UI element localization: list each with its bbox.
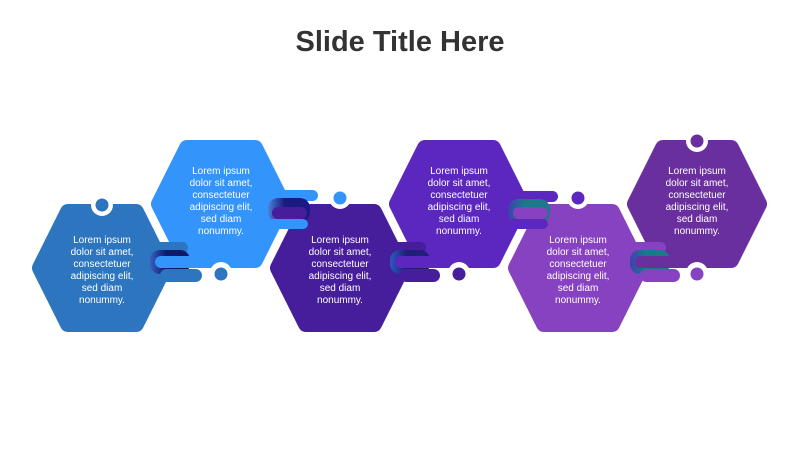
hexagon 2: consectetuer <box>192 190 250 201</box>
hexagon 2: dolor sit amet, <box>190 178 252 189</box>
hexagon 5: nonummy. <box>555 295 601 306</box>
hexagon 4: consectetuer <box>430 190 488 201</box>
hexagon 6: nonummy. <box>674 226 720 237</box>
hexagon 4: dolor sit amet, <box>428 178 490 189</box>
hexagon 2: adipiscing elit, <box>190 202 252 213</box>
hexagon 4: sed diam <box>439 214 479 225</box>
hexagon 2 <box>159 148 283 284</box>
hexagon 2: nonummy. <box>198 226 244 237</box>
hexagon 5: consectetuer <box>549 259 607 270</box>
hexagon 1: nonummy. <box>79 295 125 306</box>
hexagon 2: sed diam <box>201 214 241 225</box>
hexagon 1: adipiscing elit, <box>71 271 133 282</box>
hexagon 6: consectetuer <box>668 190 726 201</box>
hexagon 1 <box>40 194 164 324</box>
connector 4-5 <box>508 191 558 229</box>
hexagon 5: Lorem ipsum <box>549 235 607 246</box>
hexagon 4: nonummy. <box>436 226 482 237</box>
hexagon 6: sed diam <box>677 214 717 225</box>
hexagon 6: dolor sit amet, <box>666 178 728 189</box>
hexagon 2: Lorem ipsum <box>192 166 250 177</box>
connector 5-6 <box>628 242 680 282</box>
hexagon 4: Lorem ipsum <box>430 166 488 177</box>
hexagon 6: adipiscing elit, <box>666 202 728 213</box>
hexagon 3: sed diam <box>320 283 360 294</box>
hexagon 3: nonummy. <box>317 295 363 306</box>
hexagon 3: consectetuer <box>311 259 369 270</box>
hexagon 1: sed diam <box>82 283 122 294</box>
hexagon 3: adipiscing elit, <box>309 271 371 282</box>
hexagon 5: sed diam <box>558 283 598 294</box>
title: Slide Title Here <box>296 26 504 58</box>
hexagon 5 <box>516 187 640 324</box>
hexagon 1: consectetuer <box>73 259 131 270</box>
hexagon 5: dolor sit amet, <box>547 247 609 258</box>
hexagon 4 <box>397 148 521 284</box>
connector 2-3 <box>268 190 318 229</box>
connector 1-2 <box>150 242 202 282</box>
hexagon 6: Lorem ipsum <box>668 166 726 177</box>
hexagon 6 <box>635 130 759 284</box>
hexagon 4: adipiscing elit, <box>428 202 490 213</box>
connector 3-4 <box>388 242 440 282</box>
hexagon 1: dolor sit amet, <box>71 247 133 258</box>
hexagon 3: Lorem ipsum <box>311 235 369 246</box>
hexagon 3: dolor sit amet, <box>309 247 371 258</box>
hexagon 5: adipiscing elit, <box>547 271 609 282</box>
hexagon 1: Lorem ipsum <box>73 235 131 246</box>
hexagon 3 <box>278 187 402 324</box>
